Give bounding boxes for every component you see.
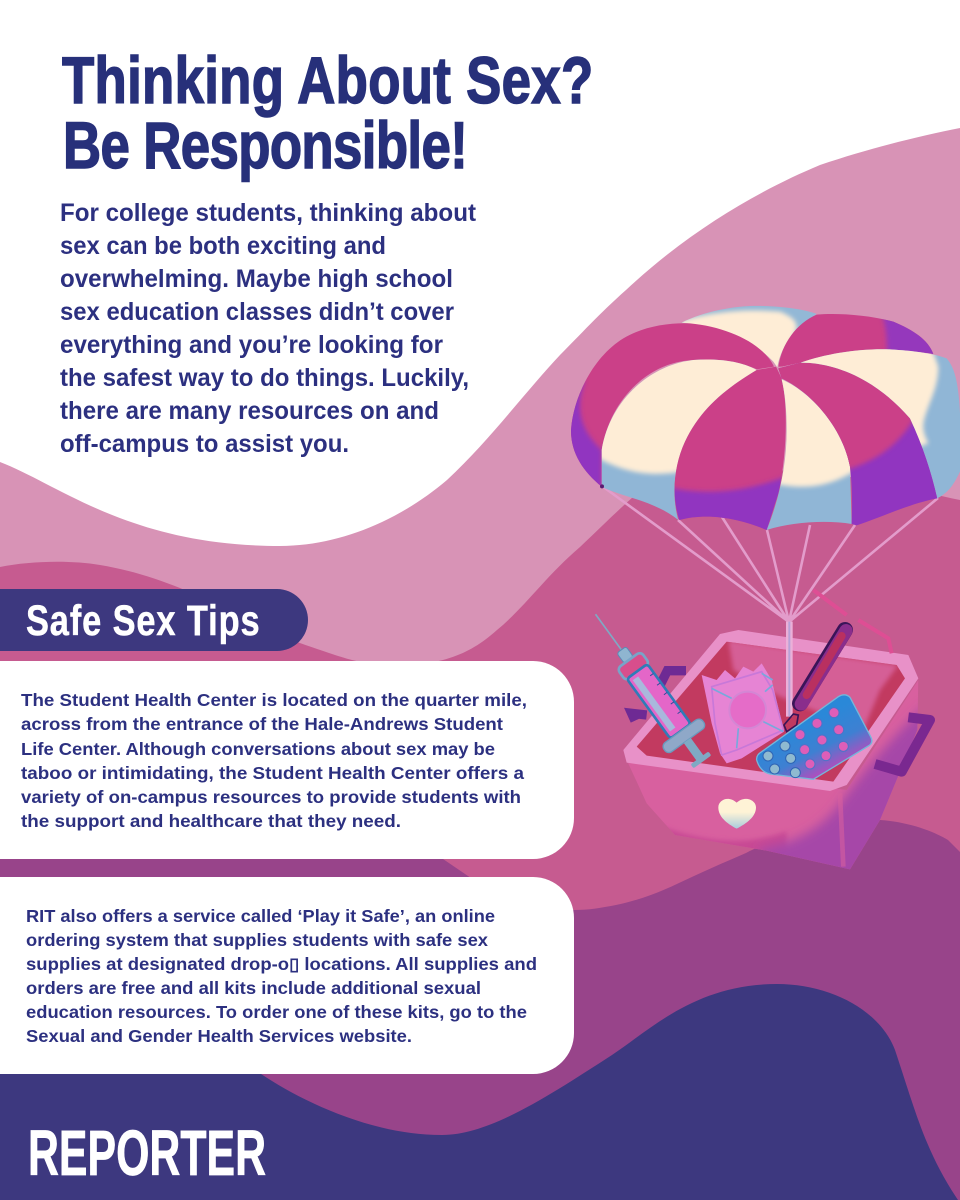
panel: Play it Safe card: Sexual and Gender Health Services website. xyxy=(26,1026,412,1046)
crate rim xyxy=(623,630,918,791)
intro text block: For college students, thinking about xyxy=(60,199,477,227)
icon: crate right handle xyxy=(875,717,930,772)
cord stem over crate xyxy=(779,622,799,717)
intro text block: off-campus to assist you. xyxy=(60,430,349,458)
panel: Play it Safe card: education resources. To order one of these kits, go to the xyxy=(26,1002,527,1022)
intro text block: everything and you’re looking for xyxy=(60,331,443,359)
intro text block: there are many resources on and xyxy=(60,397,439,425)
title xyxy=(62,43,593,182)
intro text block: overwhelming. Maybe high school xyxy=(60,265,453,293)
panel: Student Health Center card: across from the entrance of the Hale-Andrews Student xyxy=(21,714,503,734)
panel: Play it Safe card: supplies at designated drop-o▯ locations. All supplies and xyxy=(26,954,537,974)
intro text block: sex can be both exciting and xyxy=(60,232,386,260)
icon: parachute canopy xyxy=(571,306,960,530)
panel: Play it Safe card: RIT also offers a service called ‘Play it Safe’, an online xyxy=(26,906,495,926)
icon: crate with safe sex supplies xyxy=(576,590,930,883)
icon: condom wrapper xyxy=(702,663,784,763)
title: Thinking About Sex? xyxy=(62,43,593,117)
heading banner: Safe Sex Tips: Safe Sex Tips xyxy=(26,597,260,645)
panel: Student Health Center card: Life Center. Although conversations about sex may be xyxy=(21,739,495,759)
panel: Student Health Center card: taboo or intimidating, the Student Health Center offers a xyxy=(21,763,524,783)
crate interior xyxy=(633,640,910,783)
heading banner: Safe Sex Tips xyxy=(0,589,308,651)
title: Be Responsible! xyxy=(63,108,468,182)
icon: pill blister pack xyxy=(757,695,872,779)
icon: tampon xyxy=(784,590,892,732)
intro text block: the safest way to do things. Luckily, xyxy=(60,364,469,392)
panel: Play it Safe card: ordering system that supplies students with safe sex xyxy=(26,930,488,950)
panel: Student Health Center card xyxy=(0,661,574,859)
icon: heart on crate xyxy=(718,799,756,829)
panel: Play it Safe card: orders are free and all kits include additional sexual xyxy=(26,978,481,998)
icon: syringe xyxy=(576,600,722,776)
panel: Student Health Center card: the support and healthcare that they need. xyxy=(21,811,401,831)
intro text block xyxy=(60,199,477,458)
intro text block: sex education classes didn’t cover xyxy=(60,298,454,326)
icon: crate left handle xyxy=(632,671,686,721)
panel: Student Health Center card: variety of on-campus resources to provide students with xyxy=(21,787,521,807)
panel: Play it Safe card xyxy=(0,877,574,1074)
parachute cords xyxy=(602,486,938,622)
panel: Student Health Center card: The Student Health Center is located on the quarter mile, xyxy=(21,690,527,710)
crate body xyxy=(628,681,918,870)
logo: REPORTER: REPORTER xyxy=(28,1117,266,1189)
